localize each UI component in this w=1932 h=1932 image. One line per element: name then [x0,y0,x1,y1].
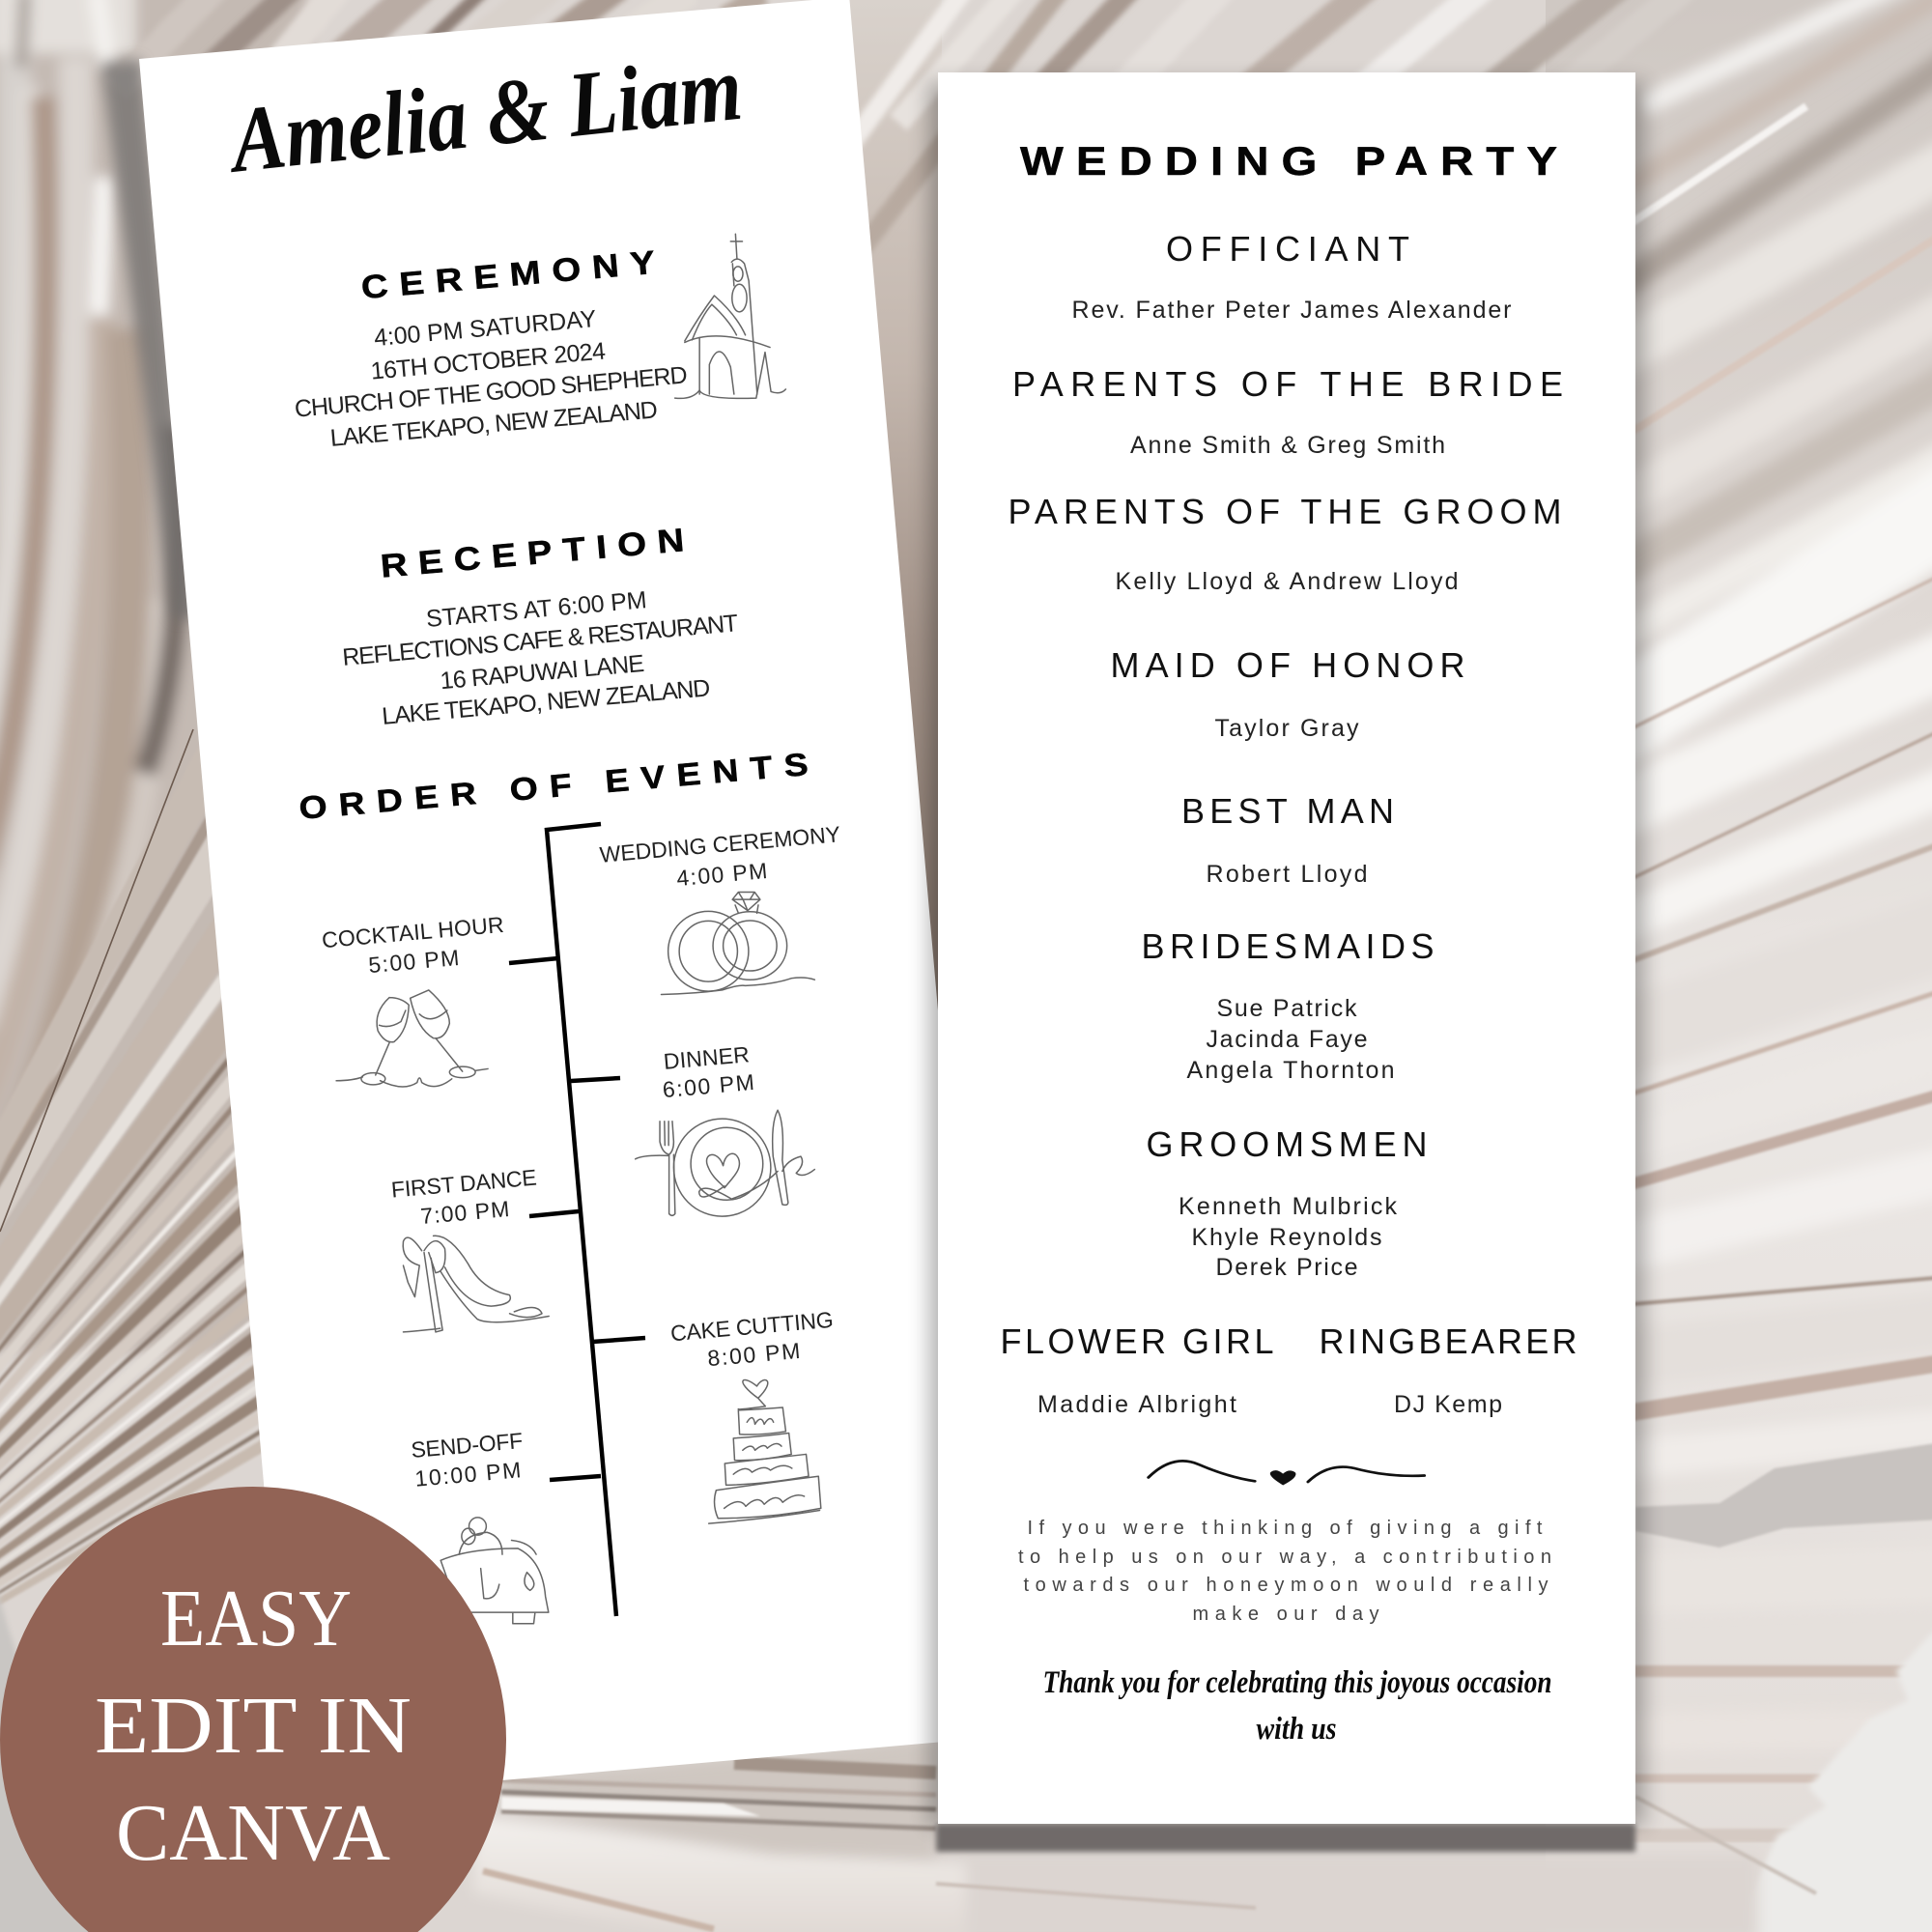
event: first dance: 7:00 PM [419,1196,510,1229]
right card shadow on neighbours [929,82,1644,1826]
event: wedding ceremony: 4:00 PM [675,858,768,891]
event: wedding ceremony [599,821,841,995]
event: send-off: SEND-OFF [410,1428,524,1463]
section: bridesmaids: BRIDESMAIDS [1142,926,1434,966]
section: parents of the groom [1009,492,1561,595]
section: parents of the bride: Anne Smith & Greg Smith [1130,432,1445,459]
text block: reception lines [341,586,739,730]
icon: rings [661,893,814,995]
icon: plate and cutlery [636,1110,814,1216]
background: lower left fan of streaks [0,631,793,1836]
section: bridesmaids: Angela Thornton [1186,1057,1395,1084]
title: couple names: Amelia & Liam [222,36,747,192]
icon: church [675,234,785,398]
event: cocktail hour [321,912,505,1087]
section: flower girl: FLOWER GIRL [1001,1321,1273,1361]
section: ringbearer: DJ Kemp [1394,1391,1502,1418]
background: grey fold right [1635,1442,1932,1548]
event: cake cutting [669,1307,835,1523]
icon: wedding cake [709,1380,821,1523]
section: bridesmaids [1142,926,1434,1084]
text block: ceremony lines: LAKE TEKAPO, NEW ZEALAND [329,396,659,452]
text block: reception lines: LAKE TEKAPO, NEW ZEALAND [381,674,711,730]
event: cocktail hour: COCKTAIL HOUR [321,912,505,952]
heading: wedding party: WEDDING PARTY [1020,139,1557,184]
section: parents of the bride [1012,364,1563,459]
event: first dance: FIRST DANCE [390,1164,538,1203]
background: white sliver [501,1797,760,1816]
heading: reception: RECEPTION [379,521,686,584]
icon: high heel shoe [403,1236,549,1332]
event: send-off [410,1428,549,1624]
callout: easy edit in canva badge: EASY [160,1574,352,1663]
section: ringbearer: RINGBEARER [1320,1321,1577,1361]
text block: gift note: make our day [1192,1604,1379,1625]
section: best man: BEST MAN [1181,791,1394,831]
section: groomsmen [1146,1124,1428,1281]
text block: thank you: Thank you for celebrating this joyous occasion [1043,1665,1551,1700]
text block: gift note: to help us on our way, a contribution [1018,1547,1551,1568]
section: bridesmaids: Sue Patrick [1217,995,1357,1022]
background: leaf fold line [0,729,193,1232]
callout: easy edit in canva badge [0,1487,506,1932]
section: officiant: OFFICIANT [1166,229,1409,269]
icon: heart flourish [1149,1461,1425,1485]
heading: ceremony: CEREMONY [359,243,657,306]
text block: reception lines: 16 RAPUWAI LANE [439,650,645,695]
section: groomsmen: Derek Price [1215,1254,1358,1281]
panel: ceremony details [294,243,689,452]
section: flower girl: Maddie Albright [1037,1391,1236,1418]
panel: reception details [341,521,739,730]
text block: thank you [1043,1665,1551,1747]
section: officiant: Rev. Father Peter James Alexander [1072,297,1511,324]
section: parents of the bride: PARENTS OF THE BRIDE [1012,364,1563,404]
section: bridesmaids: Jacinda Faye [1206,1026,1368,1053]
section: groomsmen: Kenneth Mulbrick [1179,1193,1397,1220]
section: maid of honor [1111,645,1464,742]
background: right side thin streaks [1488,106,1932,1835]
text block: ceremony lines: 4:00 PM SATURDAY [373,305,598,352]
text block: ceremony lines [294,305,689,452]
section: parents of the groom: PARENTS OF THE GROOM [1009,492,1561,531]
section: officiant [1072,229,1511,324]
event: dinner: 6:00 PM [662,1069,755,1102]
background: right side broad bands [1488,0,1932,1734]
event: dinner: DINNER [663,1041,751,1074]
text block: gift note [1018,1518,1551,1625]
background: bottom streaks [473,1739,1758,1932]
background: top band streaks [116,0,1719,276]
callout: easy edit in canva badge: CANVA [116,1788,390,1878]
section: best man: Robert Lloyd [1206,861,1368,888]
panel: right card [938,72,1635,1824]
event: cake cutting: CAKE CUTTING [669,1307,835,1346]
section: groomsmen: GROOMSMEN [1146,1124,1428,1164]
background: bottom left grey corner [0,1570,116,1932]
section: ringbearer [1320,1321,1577,1418]
right card bottom shadow band [936,1824,1635,1852]
icon: getaway car [440,1518,549,1624]
icon: champagne glasses [336,990,488,1087]
text block: ceremony lines: CHURCH OF THE GOOD SHEPHERD [294,361,689,423]
section: flower girl [1001,1321,1273,1418]
event: dinner [636,1041,814,1216]
heading: order of events: ORDER OF EVENTS [298,747,810,827]
section: best man [1181,791,1394,888]
text block: ceremony lines: 16TH OCTOBER 2024 [370,337,607,385]
panel: left card [139,0,1002,1799]
chart: timeline [509,824,645,1616]
text block: thank you: with us [1256,1712,1337,1747]
background: upper left folds [0,0,309,1352]
text block: gift note: towards our honeymoon would really [1024,1575,1548,1596]
text block: reception lines: STARTS AT 6:00 PM [425,586,648,633]
event: first dance [390,1164,549,1332]
event: cake cutting: 8:00 PM [706,1338,801,1371]
section: maid of honor: Taylor Gray [1215,715,1359,742]
text block: gift note: If you were thinking of giving a gift [1028,1518,1543,1539]
event: send-off: 10:00 PM [413,1457,522,1492]
left card shadow [101,59,198,618]
text block: reception lines: REFLECTIONS CAFE & RESTAURANT [341,610,739,671]
section: parents of the groom: Kelly Lloyd & Andrew Lloyd [1115,568,1459,595]
callout: easy edit in canva badge: EDIT IN [95,1681,412,1771]
section: maid of honor: MAID OF HONOR [1111,645,1464,685]
background: strip between the cards [840,0,942,1063]
event: cocktail hour: 5:00 PM [367,945,460,978]
section: groomsmen: Khyle Reynolds [1192,1224,1381,1251]
background: white leaf bottom right [1729,1623,1932,1932]
event: wedding ceremony: WEDDING CEREMONY [599,821,841,867]
